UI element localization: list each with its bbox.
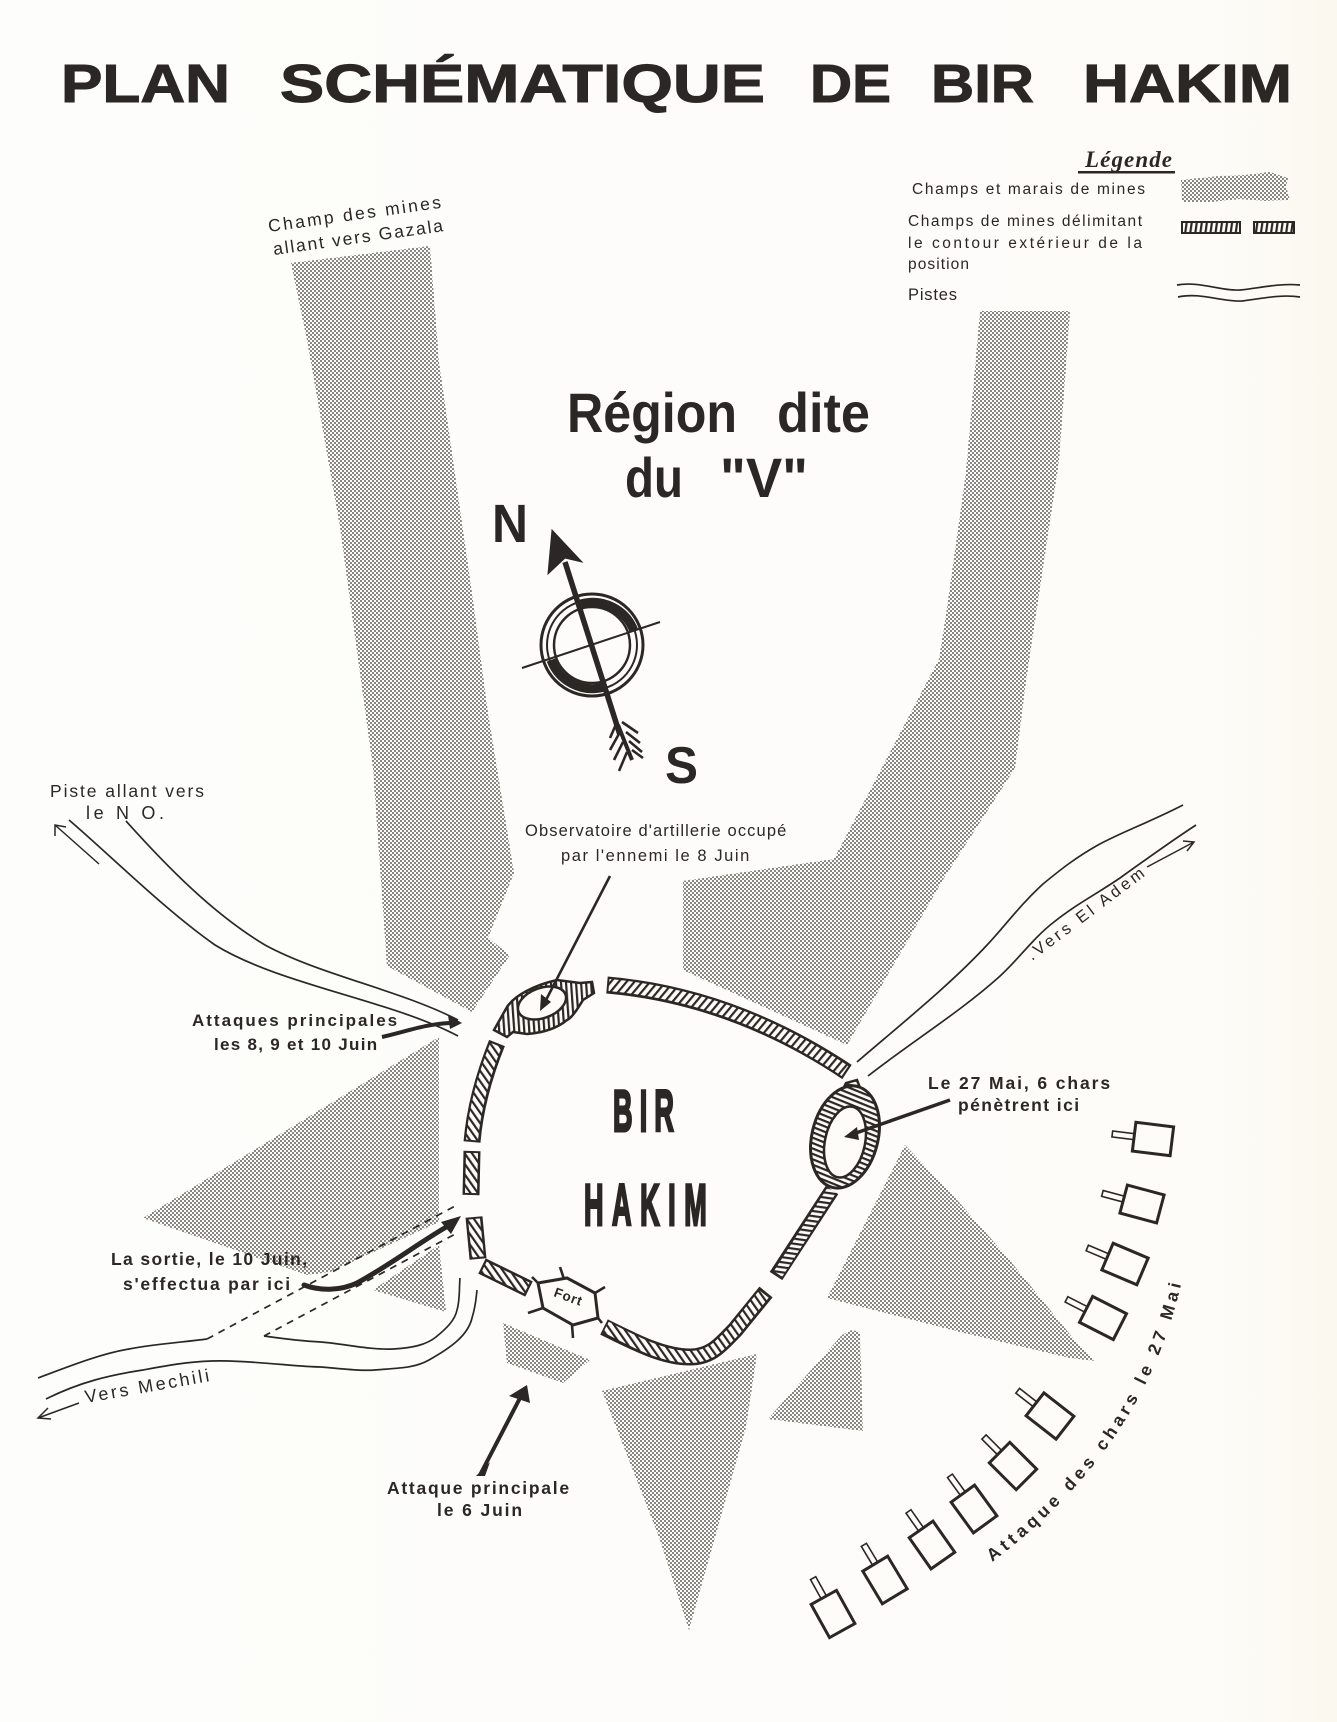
label: Bir Hakim: HAKIM [584,1172,715,1238]
heading: region of the V: "V" [720,446,808,509]
road: towards El Adem [857,805,1196,1076]
segment: near the fort [482,1266,529,1289]
compass [492,494,698,795]
label: the sortie: s'effectua par ici [123,1274,291,1294]
compass letter S: S [665,737,698,795]
minefield: small south-west triangle [373,1245,446,1312]
label: 27 May tanks enter: Le 27 Mai, 6 chars [928,1073,1111,1093]
arrow: towards El Adem [1147,841,1194,867]
compass rings [522,594,660,696]
heading: region of the V [567,381,870,509]
label: main attack 6 June [387,1478,570,1520]
segment: south-west [474,1217,478,1259]
tank 4 [1060,1286,1127,1340]
label: Bir Hakim: BIR [613,1078,681,1144]
label: main attacks 8-10 June: Attaques principales [192,1011,398,1030]
title: HAKIM [1083,54,1292,114]
heading: region of the V: dite [777,381,870,444]
arrow: towards the north-west [55,825,99,864]
tank 5 [1009,1379,1074,1439]
heading: region of the V: Région [567,381,737,444]
legend heading: Légende [1084,147,1172,172]
label: 27 May tanks enter: pénètrent ici [958,1095,1080,1115]
tank 1 [1111,1120,1174,1156]
road: towards Mechili [38,1205,477,1399]
road: north-west track [69,820,458,1036]
segment: north-west arc [472,1043,497,1142]
tank 3 [1082,1235,1148,1285]
fort [528,1267,605,1338]
legend: perimeter label [908,213,1143,273]
arrow: tanks enter [844,1100,950,1140]
label: Bir Hakim [584,1078,715,1238]
tank 2 [1099,1179,1164,1223]
minefield: left arm of the V [291,246,514,1012]
minefield: large south triangle [602,1354,757,1630]
legend: tracks label: Pistes [908,286,957,304]
title: SCHÉMATIQUE [280,54,765,114]
strongpoint: observatory oval [494,980,594,1037]
minefield: small south patch [503,1323,590,1383]
label: Gazala minefield [267,192,445,259]
heading: region of the V: du [625,446,683,509]
fort label: Fort [552,1285,585,1309]
tank 6 [974,1427,1037,1490]
minefield: west triangle [143,1037,439,1275]
tank 8 [897,1503,955,1569]
label: Vers El Adem: .Vers El Adem [1024,864,1149,964]
perimeter: position outline [471,985,847,1357]
minefield: small south-east triangle [768,1330,863,1431]
title: DE [810,54,891,114]
label: 27 May tanks enter [928,1073,1111,1115]
arrow: the sortie [304,1216,461,1289]
legend: perimeter label: Champs de mines délimitant [908,213,1143,230]
label: observatory: Observatoire d'artillerie occupé [525,822,787,840]
segment: west [471,1151,472,1195]
minefield: east triangle [827,1145,1095,1361]
label: Gazala minefield: Champ des mines [267,192,443,236]
label: tank attack along the arc: Attaque des chars le 27 Mai [988,1282,1181,1562]
label: observatory [525,822,787,865]
label: north-west track: Piste allant vers [50,781,205,801]
label: main attack 6 June: le 6 Juin [437,1500,523,1520]
compass letter N: N [492,494,528,554]
legend: perimeter label: le contour extérieur de la [908,235,1142,252]
legend: perimeter label: position [908,256,969,273]
segment: south-east straight [776,1190,832,1276]
label: the sortie [111,1249,308,1294]
strongpoint: east oval [800,1079,890,1195]
minefield: right arm of the V [683,311,1070,1045]
tank 9 [851,1537,907,1604]
tanks: attack of 27 May [800,1120,1174,1638]
label: main attacks 8-10 June: les 8, 9 et 10 Juin [214,1035,378,1054]
label: the sortie: La sortie, le 10 Juin, [111,1249,308,1269]
legend: minefields label: Champs et marais de mines [912,181,1145,198]
tank 10 [800,1571,855,1638]
title: BIR [931,54,1034,114]
label: north-west track: le N O. [86,803,165,823]
label: Vers Mechili: Vers Mechili [83,1365,212,1407]
legend: minefields swatch [1181,172,1290,202]
label: north-west track [50,781,205,823]
title [61,54,1292,114]
arrow: main attacks 8-10 June [382,1015,462,1037]
label: observatory: par l'ennemi le 8 Juin [561,847,750,865]
arrow: towards Mechili [38,1403,79,1419]
label: main attack 6 June: Attaque principale [387,1478,570,1498]
legend [908,147,1300,304]
segment: south arc [604,1292,766,1357]
legend: perimeter swatch [1182,222,1294,233]
title: PLAN [61,54,230,114]
legend: tracks swatch [1177,284,1300,301]
label: Gazala minefield: allant vers Gazala [272,215,445,259]
tank 7 [938,1467,997,1533]
arrow: to observatory [540,876,610,1011]
arrow: main attack 6 June [476,1385,530,1476]
segment: north arc [607,985,847,1072]
label: main attacks 8-10 June [192,1011,398,1054]
compass needle [548,530,643,771]
